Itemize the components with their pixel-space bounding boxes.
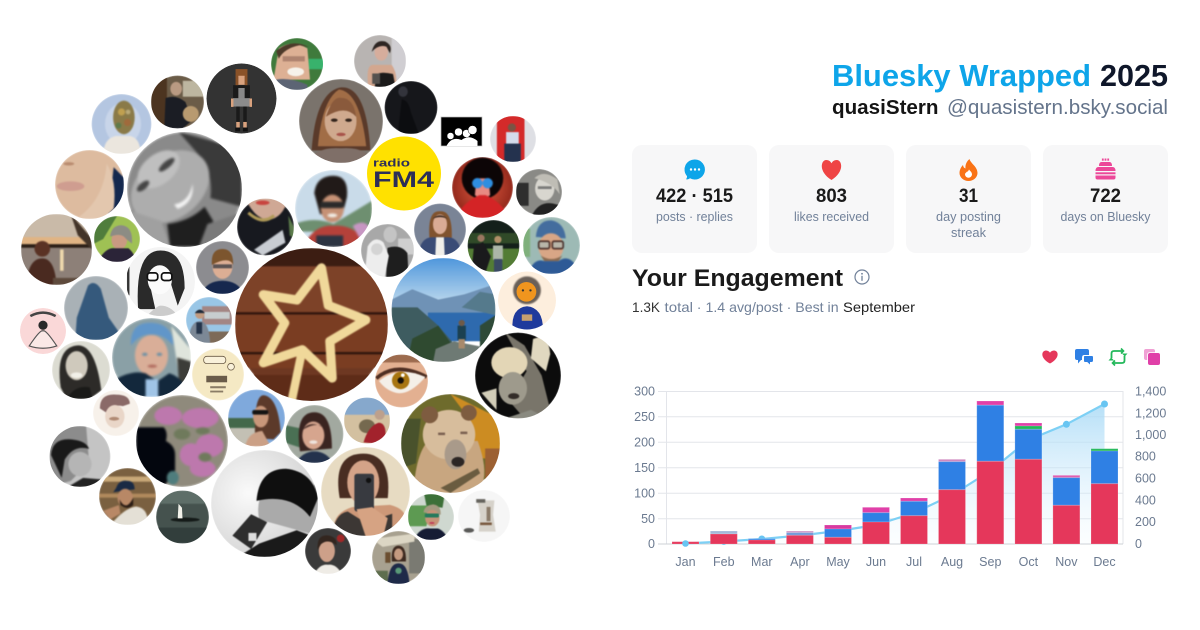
avatar: neon star on wooden wall <box>235 248 388 406</box>
avatar: blue shadow on wall <box>64 276 128 340</box>
avatar: black and white woman by wall <box>50 426 110 487</box>
avatar: woman with green sunglasses <box>408 494 454 540</box>
avatar: woman at sunset lake <box>21 214 92 285</box>
avatar: woman in blue beanie <box>112 318 191 397</box>
x-axis month labels: Jul <box>906 555 922 569</box>
avatar: woman among pink flowers <box>136 395 228 487</box>
avatar: radio FM4 logo <box>367 136 441 210</box>
y-axis labels: left: 150 <box>634 461 655 475</box>
avatar: large grey smiling face <box>117 132 242 247</box>
stat card: day posting streak: day posting <box>936 210 1001 224</box>
y-axis labels: left: 200 <box>634 436 655 450</box>
icon: heart <box>822 160 841 180</box>
y-axis labels: left: 100 <box>634 486 655 500</box>
engagement summary line: · 1.4 avg/post · Best in <box>697 299 839 315</box>
y-axis labels: right: 200 <box>1135 515 1156 529</box>
y-axis labels: left <box>634 384 655 551</box>
avatar: woman with phone mirror selfie <box>321 447 410 536</box>
stat card: day posting streak: streak <box>951 226 987 240</box>
avatar: smiling woman with glasses, green background <box>271 38 324 90</box>
stat card: days on Bluesky <box>1043 145 1168 253</box>
icon: likes heart <box>1042 350 1058 364</box>
avatar: black and white woman smoking <box>516 169 562 215</box>
avatar: black-haired woman <box>52 341 110 399</box>
y-axis labels: right: 400 <box>1135 494 1156 508</box>
chart legend icons <box>1042 348 1160 366</box>
stat card: day posting streak: 31 <box>959 186 978 207</box>
avatar: short-haired woman <box>305 528 351 574</box>
y-axis labels: right <box>1135 384 1166 551</box>
avatar: black beanie woman drinking from mug <box>211 450 318 557</box>
avatar: bird on dark water <box>156 490 209 544</box>
x-axis month labels: Jan <box>675 555 696 569</box>
profile name and handle: @quasistern.bsky.social <box>947 97 1168 119</box>
January data point <box>682 540 689 547</box>
avatar: woman with red jacket and blue sunglasses <box>452 157 513 218</box>
avatar: two people in green field <box>468 220 520 272</box>
avatar: person at beach in red jacket <box>344 398 390 444</box>
avatar: woman in sunglasses at beach <box>228 390 285 446</box>
avatar: grey-haired woman, green background <box>94 216 140 262</box>
y-axis labels: right: 800 <box>1135 450 1156 464</box>
profile name and handle <box>832 97 1168 119</box>
avatar: flower-covered face <box>92 94 152 154</box>
avatar: painted portrait of a girl <box>299 79 383 163</box>
stat card: likes received <box>769 145 894 253</box>
stat card: day posting streak <box>906 145 1031 253</box>
stat card: likes received: 803 <box>816 186 847 207</box>
avatar: black and white father with baby <box>361 224 414 277</box>
stat card: posts and replies: 422 · 515 <box>656 186 733 207</box>
y-axis labels: left: 300 <box>634 384 655 398</box>
icon: flame <box>960 159 978 181</box>
avatar: manga sketch with glasses <box>126 247 195 316</box>
x-axis month labels: Nov <box>1055 555 1078 569</box>
avatar: stone statue on black <box>475 332 561 418</box>
avatar: dark silhouette <box>384 81 438 134</box>
avatar: necklace and band t-shirt <box>237 198 294 256</box>
x-axis month labels: Dec <box>1093 555 1116 569</box>
icon: reposts arrows <box>1108 348 1128 366</box>
x-axis month labels: Sep <box>979 555 1001 569</box>
avatar: sepia woman with short hair <box>93 390 139 436</box>
stat card: posts and replies <box>632 145 757 253</box>
icon: speech bubble <box>685 159 705 179</box>
title: Bluesky Wrapped 2025: Bluesky Wrapped <box>832 59 1091 93</box>
avatar: woman at red door <box>490 116 536 162</box>
icon: quotes copy squares <box>1144 349 1160 365</box>
y-axis labels: right: 1,200 <box>1135 406 1166 420</box>
avatar: man in front of train <box>186 297 232 343</box>
avatar: woman in mirror selfie <box>354 35 406 87</box>
avatar: moka pot on white <box>458 490 510 542</box>
stat card: days on Bluesky: days on Bluesky <box>1060 210 1151 224</box>
engagement combo chart <box>634 384 1166 569</box>
avatar: pixel-art figure <box>206 63 276 133</box>
y-axis labels: left: 0 <box>648 537 655 551</box>
x-axis month labels <box>675 555 1116 569</box>
avatar: radio FM4 logo: radio <box>373 158 410 170</box>
title: Bluesky Wrapped 2025: 2025 <box>1100 59 1168 93</box>
avatar: man in dark jacket <box>151 76 204 128</box>
heading: Your Engagement: Your Engagement <box>632 265 843 292</box>
avatar: smiling woman with brown hair <box>286 405 344 463</box>
x-axis month labels: Jun <box>866 555 886 569</box>
avatar bubble cluster <box>20 35 580 584</box>
avatar: woman in museum hall <box>372 531 425 584</box>
y-axis labels: left: 250 <box>634 410 655 424</box>
y-axis labels: right: 1,400 <box>1135 384 1166 398</box>
y-axis labels: right: 600 <box>1135 472 1156 486</box>
x-axis month labels: Oct <box>1019 555 1039 569</box>
avatar: cream comic sketch <box>192 348 244 400</box>
x-axis month labels: Apr <box>790 555 810 569</box>
icon: info <box>855 270 869 284</box>
engagement summary line <box>632 299 915 315</box>
avatar: pink badge with drawn figure <box>20 308 66 354</box>
stat card: days on Bluesky: 722 <box>1090 186 1121 207</box>
x-axis month labels: Feb <box>713 555 735 569</box>
avatar: close-up of lips and cheek <box>55 150 124 219</box>
stat card: posts and replies: posts · replies <box>656 210 733 224</box>
stat card: likes received: likes received <box>794 210 869 224</box>
avatar: orange cartoon character <box>498 272 556 330</box>
x-axis month labels: Aug <box>941 555 963 569</box>
icon: birthday cake <box>1096 158 1116 180</box>
engagement summary line: 1.3K <box>632 299 661 315</box>
engagement summary line: total <box>664 299 693 315</box>
y-axis labels: left: 50 <box>641 512 655 526</box>
avatar: bearded man in blue beanie with glasses <box>523 217 580 274</box>
engagement summary line: September <box>843 299 915 315</box>
avatar: man with glasses and navy shirt <box>196 241 249 294</box>
x-axis month labels: Mar <box>751 555 773 569</box>
avatar: black square logo <box>441 117 482 146</box>
y-axis labels: right: 1,000 <box>1135 428 1166 442</box>
avatar: woman in blue blazer <box>414 204 466 256</box>
avatar: brown bear in autumn forest <box>401 394 500 493</box>
avatar: man in cap with book shelves <box>99 468 156 525</box>
avatar: curly-haired woman with life vest <box>295 170 372 247</box>
icon: replies chat bubbles <box>1075 349 1093 364</box>
avatar: close-up of a hazel eye <box>375 354 428 408</box>
cumulative area and line <box>686 400 1108 545</box>
avatar: radio FM4 logo: FM4 <box>373 167 435 192</box>
profile name and handle: quasiStern <box>832 97 938 119</box>
y-axis labels: right: 0 <box>1135 537 1142 551</box>
x-axis month labels: May <box>826 555 851 569</box>
stacked bars by month <box>672 401 1118 544</box>
avatar: mountain lake landscape <box>392 258 496 362</box>
